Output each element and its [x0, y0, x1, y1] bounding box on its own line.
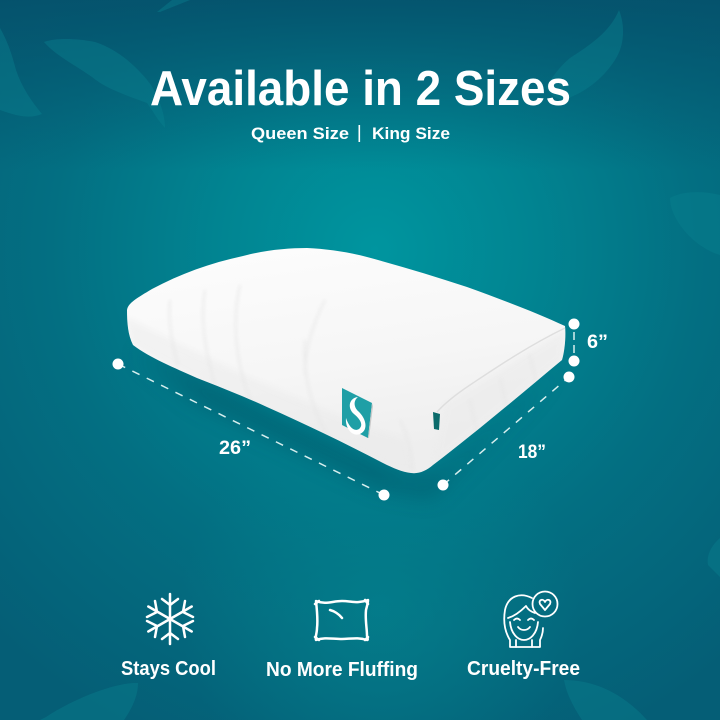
dimension: 26 inch width — [112, 358, 390, 500]
dimension: 18 inch depth — [438, 372, 574, 490]
icon: pillow outline — [315, 600, 368, 640]
subtitle: King Size — [372, 124, 450, 143]
dimension: 18 inch depth: 18” — [518, 442, 546, 463]
feature: stays cool — [121, 594, 216, 680]
subtitle — [251, 124, 450, 143]
icon: smiling face with heart bubble — [504, 592, 558, 647]
pillow folds — [128, 325, 566, 464]
tag logo — [346, 397, 366, 435]
feature: cruelty-free — [467, 592, 580, 680]
feature: no more fluffing: No More Fluffing — [266, 659, 418, 681]
brand tag — [342, 388, 373, 438]
dimension: 6 inch height — [568, 318, 608, 366]
piping seam — [437, 328, 565, 412]
feature: cruelty-free: Cruelty-Free — [467, 658, 580, 680]
dimension: 6 inch height: 6” — [587, 332, 608, 353]
feature: stays cool: Stays Cool — [121, 658, 216, 680]
title: Available in 2 Sizes — [150, 62, 571, 116]
zipper pull — [433, 412, 440, 430]
subtitle: Queen Size — [251, 124, 349, 143]
pillow — [127, 248, 565, 473]
dimension: 26 inch width: 26” — [219, 438, 251, 459]
pillow shadow — [135, 350, 560, 495]
feature: no more fluffing — [266, 600, 418, 681]
icon: snowflake — [147, 594, 193, 644]
